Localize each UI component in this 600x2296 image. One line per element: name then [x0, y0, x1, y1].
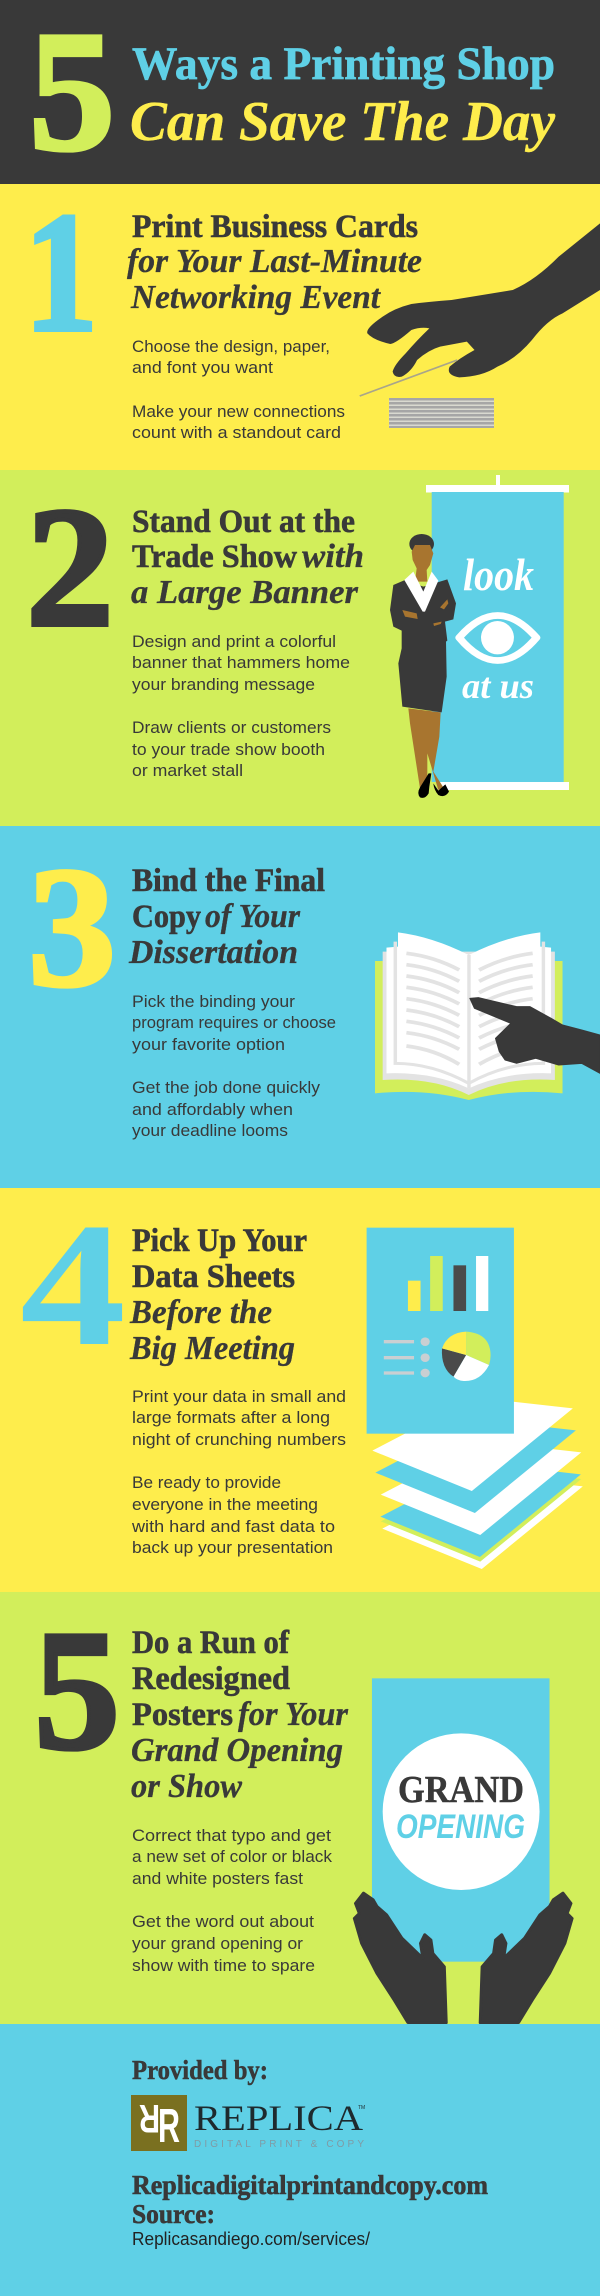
heading 5: Redesigned [132, 1661, 290, 1697]
body text 5: your grand opening or [132, 1934, 303, 1953]
heading 1: for Your Last-Minute [127, 243, 422, 280]
body text 4: Print your data in small and [132, 1387, 346, 1406]
icon: open book with pointing hand [375, 932, 600, 1100]
logo: Replica: R [158, 2100, 180, 2153]
body text 2: or market stall [132, 761, 243, 780]
body text 1: count with a standout card [132, 423, 341, 442]
icon: eye [459, 615, 537, 660]
title line 1: Ways a Printing Shop [132, 38, 555, 90]
heading 2: Trade Show [132, 539, 297, 575]
body text 4: night of crunching numbers [132, 1430, 346, 1449]
body text 3: Get the job done quickly [132, 1078, 321, 1097]
body text 3: Pick the binding your [132, 992, 295, 1011]
body text 4: everyone in the meeting [132, 1495, 318, 1514]
body text 2: to your trade show booth [132, 740, 325, 759]
body text 4: with hard and fast data to [131, 1517, 335, 1536]
body text 3: and affordably when [132, 1100, 293, 1119]
heading 2: a Large Banner [131, 574, 359, 611]
panel: step 1 business cards [0, 178, 600, 470]
number 3: 3 [28, 833, 116, 1023]
body text 1: and font you want [132, 358, 273, 377]
body text 3 [132, 992, 336, 1140]
body text 1: Make your new connections [132, 402, 345, 421]
logo: Replica: REPLICA [194, 2098, 363, 2138]
illustration: businesswoman [390, 534, 456, 798]
body text 2: Draw clients or customers [132, 718, 331, 737]
banner stand [426, 475, 569, 790]
logo: Replica: TM [358, 2105, 365, 2111]
body text 3: your deadline looms [132, 1121, 288, 1140]
heading 4 [129, 1223, 307, 1367]
source label: Source: [132, 2199, 215, 2229]
source url: Replicasandiego.com/services/ [132, 2229, 370, 2249]
heading 1: Print Business Cards [132, 209, 418, 245]
big number 5: 5 [29, 0, 115, 187]
heading 5: Do a Run of [132, 1625, 290, 1661]
heading 5 [131, 1625, 349, 1805]
body text 4: back up your presentation [132, 1538, 333, 1557]
body text 1 [132, 337, 345, 442]
heading 2: with [302, 538, 364, 575]
panel: header [0, 0, 600, 187]
panel: step 3 binding [0, 826, 600, 1188]
body text 4: Be ready to provide [132, 1473, 281, 1492]
icon: hand holding card [360, 223, 600, 396]
body text 5: Correct that typo and get [132, 1826, 331, 1845]
body text 4 [131, 1387, 346, 1557]
body text 4: large formats after a long [132, 1408, 330, 1427]
heading 3: of Your [205, 898, 301, 935]
heading 1: Networking Event [130, 279, 382, 316]
body text 5: Get the word out about [132, 1912, 314, 1931]
panel: step 4 data sheets [0, 1187, 600, 1592]
number 4: 4 [20, 1187, 126, 1383]
poster sheet [372, 1678, 550, 1962]
number 2: 2 [26, 473, 114, 663]
heading 3: Bind the Final [132, 863, 325, 899]
body text 5 [132, 1826, 333, 1975]
heading 3: Dissertation [128, 934, 298, 971]
poster word: GRAND: GRAND [398, 1769, 524, 1811]
body text 2: your branding message [132, 675, 315, 694]
heading 2: Stand Out at the [132, 504, 355, 540]
heading 5: Posters [132, 1697, 233, 1733]
heading 5: or Show [131, 1768, 242, 1805]
panel: step 2 banner [0, 470, 600, 826]
icon: card stack [389, 398, 494, 428]
banner words: at us: at us [462, 666, 534, 706]
logo: Replica: DIGITAL PRINT & COPY [194, 2139, 364, 2150]
title line 2: Can Save The Day [130, 91, 556, 153]
heading 4: Before the [129, 1294, 272, 1331]
icon: paper stack and data sheet [367, 1228, 583, 1569]
heading 5: for Your [238, 1696, 349, 1733]
body text 5: show with time to spare [132, 1956, 315, 1975]
poster with hands [354, 1678, 572, 2023]
body text 1: Choose the design, paper, [132, 337, 330, 356]
poster word: OPENING: OPENING [396, 1808, 525, 1846]
heading 5: Grand Opening [131, 1732, 343, 1769]
panel: step 5 posters [0, 1592, 600, 2024]
provided by: Provided by: [132, 2055, 268, 2085]
body text 5: and white posters fast [132, 1869, 303, 1888]
body text 3: your favorite option [132, 1035, 285, 1054]
heading 4: Data Sheets [132, 1259, 295, 1295]
body text 2: Design and print a colorful [132, 632, 336, 651]
banner word: look: look [463, 549, 534, 600]
body text 3: program requires or choose [132, 1013, 336, 1032]
heading 3 [128, 863, 325, 971]
logo: Replica [131, 2095, 365, 2153]
number 1: 1 [24, 178, 98, 368]
website: Replicadigitalprintandcopy.com [132, 2170, 488, 2200]
heading 3: Copy [132, 899, 201, 935]
body text 2: banner that hammers home [132, 653, 350, 672]
heading 1 [127, 209, 422, 316]
body text 2 [132, 632, 350, 780]
logo: Replica: R [139, 2096, 160, 2140]
icon: hands [354, 1893, 572, 2023]
number 5: 5 [34, 1596, 120, 1786]
heading 4: Pick Up Your [132, 1223, 307, 1259]
heading 2 [131, 504, 364, 611]
panel: footer credits [0, 2024, 600, 2296]
heading 4: Big Meeting [129, 1330, 295, 1367]
body text 5: a new set of color or black [132, 1847, 333, 1866]
